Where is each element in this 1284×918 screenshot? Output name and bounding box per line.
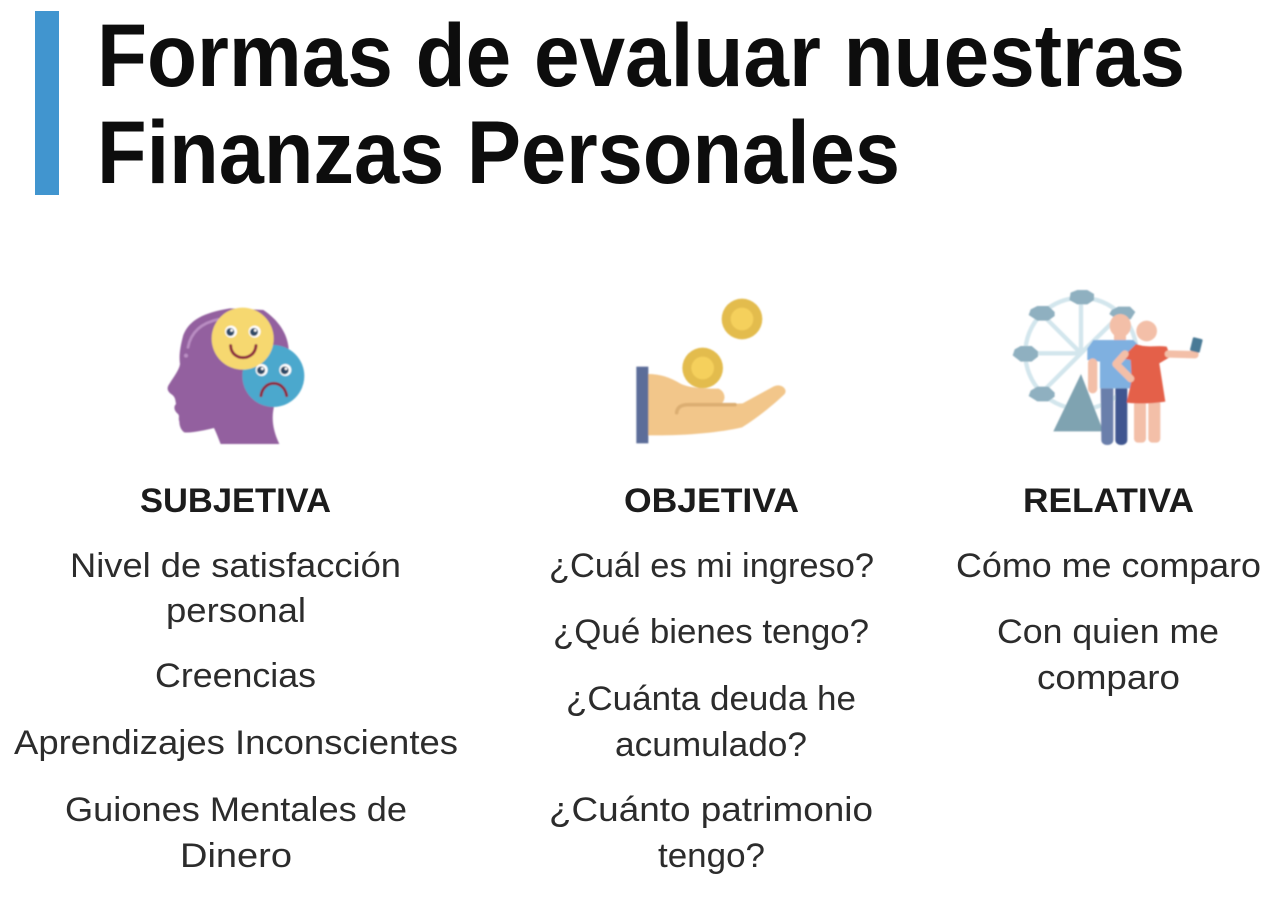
- panel: subjetiva: [14, 308, 458, 875]
- text: relativa list: [956, 547, 1261, 697]
- text: objetiva list: acumulado?: [615, 726, 807, 764]
- text: objetiva list: ¿Cuánto patrimonio: [549, 791, 873, 829]
- icon: head with smiling and sad faces: [168, 308, 304, 444]
- text: objetiva list: [549, 547, 874, 875]
- title: [97, 5, 1185, 202]
- text: relativa list: Con quien me: [997, 613, 1219, 651]
- heading: objetiva: OBJETIVA: [624, 482, 799, 520]
- text: objetiva list: tengo?: [658, 837, 765, 875]
- text: objetiva list: ¿Cuál es mi ingreso?: [549, 547, 874, 585]
- panel: relativa: [956, 290, 1261, 697]
- woman: [1136, 321, 1157, 341]
- text: objetiva list: ¿Qué bienes tengo?: [553, 613, 869, 651]
- text: subjetiva list: [14, 547, 458, 875]
- title: Formas de evaluar nuestras: [97, 5, 1185, 105]
- heading: relativa: RELATIVA: [1023, 482, 1194, 520]
- title accent bar: [35, 11, 59, 195]
- text: subjetiva list: Dinero: [180, 837, 292, 875]
- text: subjetiva list: Guiones Mentales de: [65, 791, 407, 829]
- text: subjetiva list: Aprendizajes Inconscientes: [14, 724, 458, 762]
- text: subjetiva list: Nivel de satisfacción: [70, 547, 401, 585]
- text: subjetiva list: personal: [166, 592, 306, 630]
- panel: objetiva: [549, 299, 874, 875]
- text: relativa list: comparo: [1037, 659, 1180, 697]
- icon: hand with coins: [636, 299, 786, 443]
- text: objetiva list: ¿Cuánta deuda he: [566, 680, 856, 718]
- text: subjetiva list: Creencias: [155, 657, 316, 695]
- heading: subjetiva: SUBJETIVA: [140, 482, 331, 520]
- icon: couple selfie at ferris wheel: [1013, 290, 1203, 445]
- man: [1110, 314, 1131, 337]
- text: relativa list: Cómo me comparo: [956, 547, 1261, 585]
- title: Finanzas Personales: [97, 102, 900, 202]
